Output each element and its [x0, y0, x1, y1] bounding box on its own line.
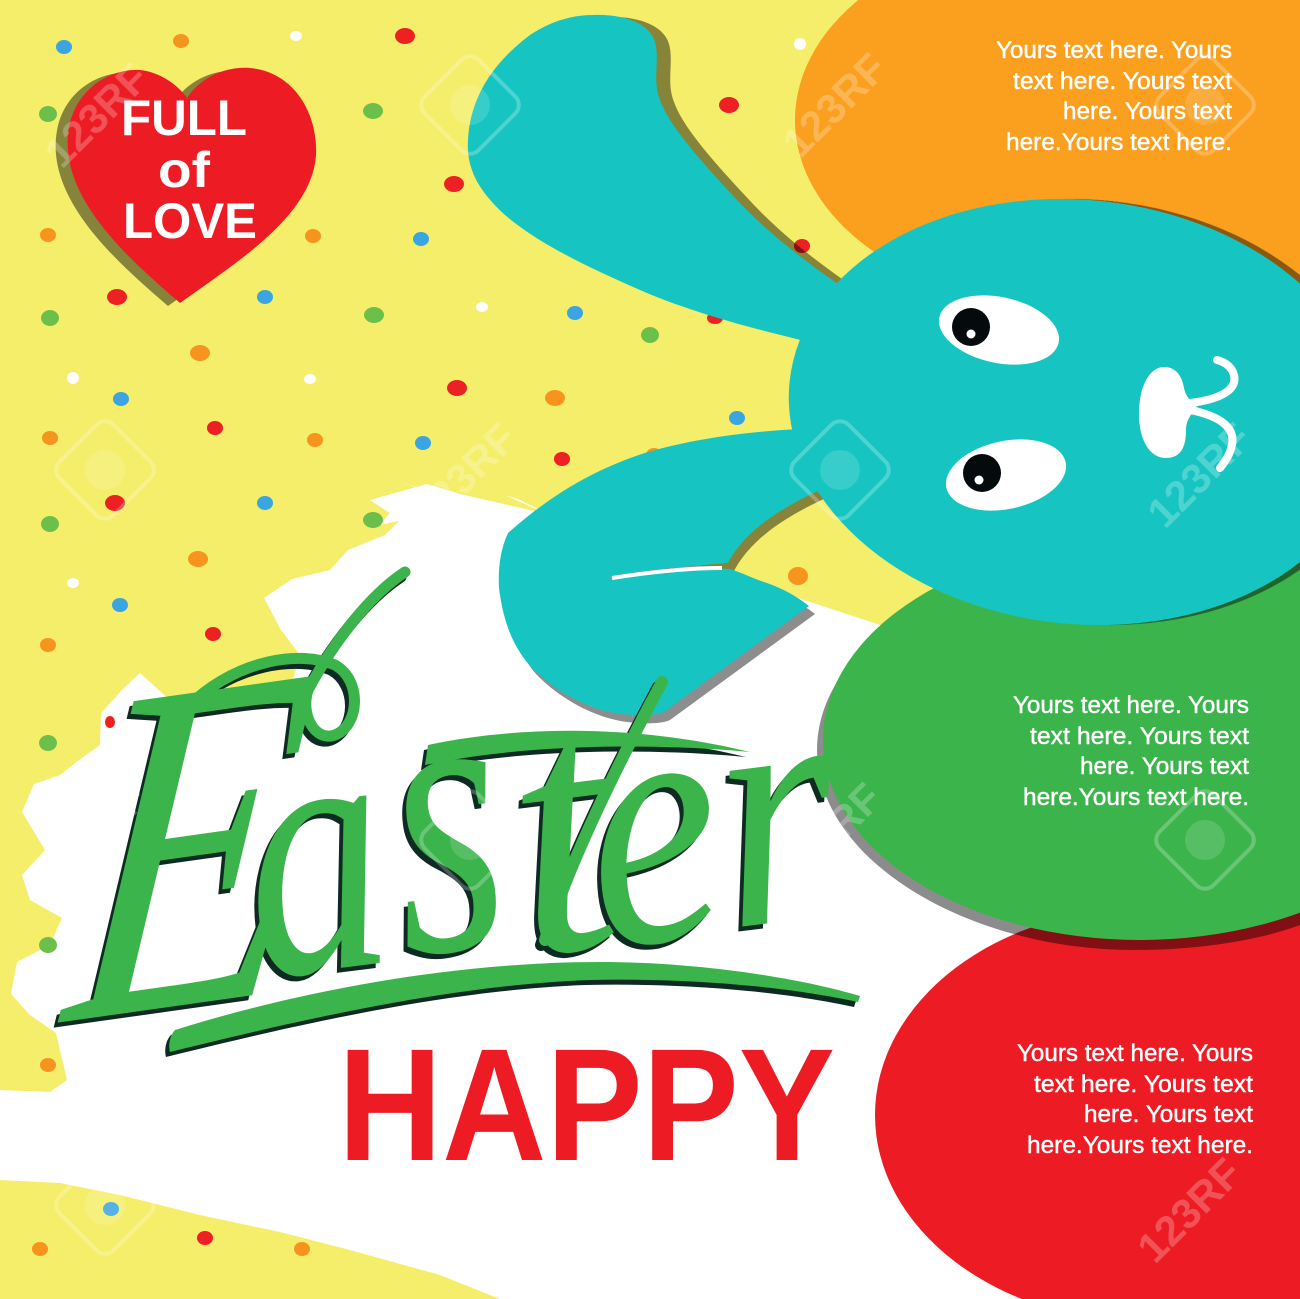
red egg text: text here. Yours text	[1034, 1071, 1253, 1098]
nose and whiskers	[1139, 360, 1234, 468]
lower eye	[939, 429, 1073, 521]
stock watermarks: 123RF	[773, 44, 896, 166]
orange egg text: here. Yours text	[1063, 98, 1232, 125]
white brush stroke	[0, 480, 1300, 1299]
heart text: FULL	[121, 90, 247, 146]
Easter lettering: t	[486, 623, 646, 1032]
stock watermarks: 123RF	[35, 54, 158, 176]
orange egg	[795, 0, 1300, 320]
stock watermarks: 123RF	[33, 774, 156, 896]
red egg text	[1017, 1040, 1253, 1159]
heart text: of	[158, 142, 210, 198]
red egg	[875, 850, 1300, 1299]
bunny lower ear	[499, 429, 860, 715]
green egg text: text here. Yours text	[1030, 723, 1249, 750]
green egg	[823, 540, 1300, 940]
heart text	[121, 90, 257, 249]
red egg text: here. Yours text	[1084, 1101, 1253, 1128]
green egg shadow	[817, 550, 1300, 950]
heart badge	[56, 68, 316, 306]
t crossbar	[425, 731, 750, 765]
bunny upper ear	[468, 15, 880, 342]
orange egg text: text here. Yours text	[1013, 68, 1232, 95]
orange egg text	[996, 37, 1232, 156]
heart text: LOVE	[123, 193, 257, 249]
bunny	[468, 15, 1300, 723]
Easter lettering: E	[45, 561, 335, 1127]
stock watermarks: 123RF	[403, 414, 526, 536]
Easter lettering: e	[562, 624, 740, 1024]
heart	[68, 68, 316, 303]
E flourish	[195, 572, 405, 736]
orange egg text: here.Yours text here.	[1006, 129, 1232, 156]
Easter lettering: r	[693, 612, 862, 1001]
confetti dots	[32, 28, 810, 1256]
red egg text: Yours text here. Yours	[1017, 1040, 1253, 1067]
green egg text	[1013, 692, 1249, 811]
stock watermarks: 123RF	[1138, 414, 1261, 536]
bunny shadow	[482, 17, 1300, 723]
stock watermarks: 123RF	[1128, 1149, 1251, 1271]
HAPPY heading: HAPPY	[338, 1015, 835, 1194]
green egg text: here. Yours text	[1080, 753, 1249, 780]
ear slit highlight	[612, 568, 722, 578]
Easter lettering: s	[362, 588, 527, 1042]
green egg text: Yours text here. Yours	[1013, 692, 1249, 719]
Easter lettering	[45, 561, 862, 1127]
stock watermarks: 123RF	[768, 774, 891, 896]
red egg text: here.Yours text here.	[1027, 1132, 1253, 1159]
orange egg text: Yours text here. Yours	[996, 37, 1232, 64]
stock watermarks: 123RF	[398, 1149, 521, 1271]
underline swash	[169, 962, 860, 1052]
bunny head	[767, 171, 1300, 653]
upper eye	[932, 285, 1066, 375]
Easter lettering: a	[219, 642, 407, 1055]
green egg text: here.Yours text here.	[1023, 784, 1249, 811]
t stem	[545, 682, 662, 940]
heart shadow	[56, 71, 304, 306]
